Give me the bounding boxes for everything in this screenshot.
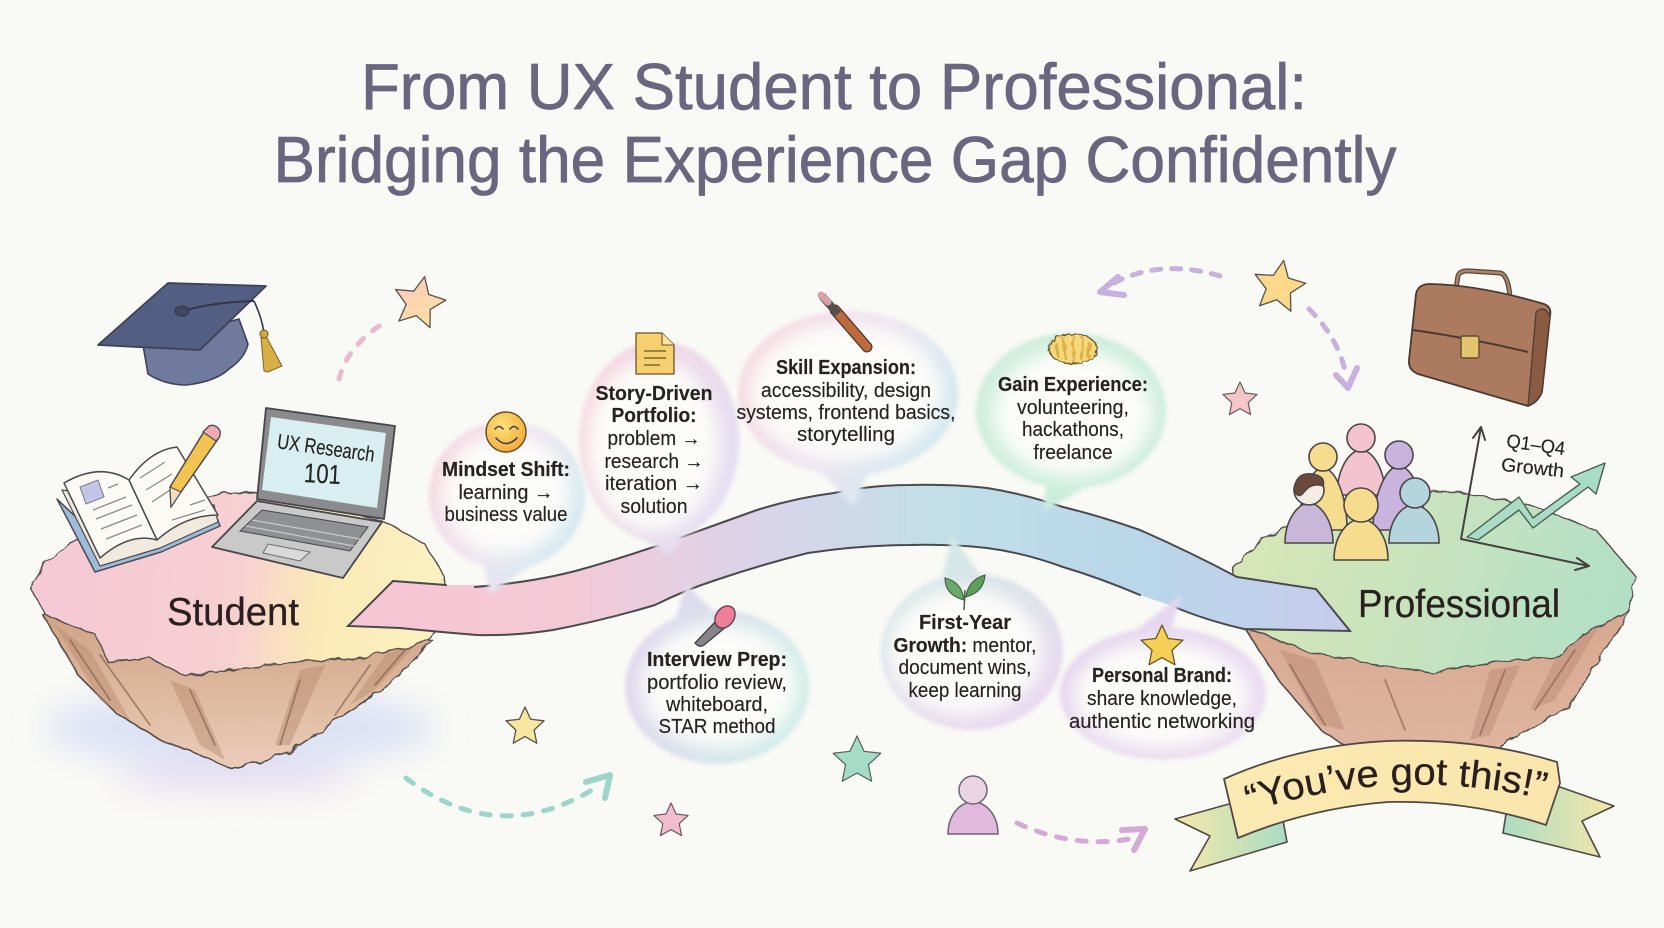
callout: mindset shift: Mindset Shift: [442, 459, 570, 481]
callout: skill expansion: storytelling [797, 424, 895, 446]
callout: mindset shift: business value [444, 504, 568, 526]
banner main scroll [1224, 741, 1560, 838]
callout: first-year growth: Growth: mentor, [894, 635, 1036, 657]
callout: personal brand: Personal Brand: [1092, 665, 1232, 687]
callout: gain experience: freelance [1034, 442, 1112, 464]
callout: first-year growth: document wins, [898, 657, 1032, 679]
callout: story-driven portfolio: Story-Driven [596, 383, 712, 405]
callout: first-year growth: keep learning [908, 680, 1022, 702]
icon: document [636, 333, 674, 374]
label: student: Student [167, 591, 299, 634]
callout: skill expansion: systems, frontend basics, [736, 402, 956, 424]
star: pink right [1223, 382, 1257, 415]
icon: briefcase [1409, 271, 1550, 406]
callout: first-year growth: First-Year [919, 612, 1011, 634]
icon: sprout [945, 575, 985, 610]
icon: smiling face [486, 412, 526, 452]
callout: story-driven portfolio: iteration → [605, 473, 703, 495]
title [274, 50, 1397, 196]
pencil [170, 425, 220, 507]
callout: skill expansion: accessibility, design [761, 380, 931, 402]
title: From UX Student to Professional: [361, 50, 1307, 123]
callout: story-driven portfolio: solution [620, 496, 688, 518]
chart: Q1-Q4 growth [1461, 427, 1605, 570]
panel: student island [30, 408, 446, 792]
label: professional: Professional [1358, 583, 1560, 626]
callout: interview prep: Interview Prep: [647, 649, 787, 671]
icon: pen [821, 295, 867, 347]
arrow: lavender dashed left [1100, 269, 1220, 295]
icon: group of people [1285, 424, 1439, 560]
callout: personal brand: authentic networking [1069, 711, 1255, 733]
island shadow [45, 688, 435, 792]
callout: story-driven portfolio: Portfolio: [612, 405, 696, 427]
callout: interview prep: whiteboard, [665, 694, 768, 716]
icon: microphone [695, 602, 739, 646]
callout: first-year growth [881, 535, 1063, 730]
callout: gain experience: hackathons, [1022, 419, 1124, 441]
callout: personal brand [1060, 595, 1266, 760]
callout: personal brand: share knowledge, [1087, 688, 1237, 710]
island rock [1244, 610, 1629, 750]
star: gold top right [1250, 256, 1309, 313]
callout: gain experience: volunteering, [1017, 397, 1129, 419]
arrow: pink dashed curve to star [339, 323, 384, 379]
chart: Q1-Q4 growth: Growth [1500, 455, 1565, 482]
chart: Q1-Q4 growth: Q1–Q4 [1505, 431, 1567, 460]
icon: gold star [1141, 625, 1183, 665]
icon: laptop [212, 408, 395, 578]
banner right tail [1503, 787, 1614, 857]
callout: story-driven portfolio [579, 333, 739, 555]
callout: gain experience: Gain Experience: [998, 374, 1148, 396]
callout: gain experience [976, 333, 1166, 512]
callout: mindset shift: learning → [458, 482, 554, 504]
arrow: pink-purple dashed [1017, 823, 1145, 850]
arrow: teal dashed [406, 775, 610, 816]
star: pink-yellow top left [389, 271, 450, 330]
icon: lone person [948, 776, 998, 834]
banner: you've got this: “You’ve got this!” [1244, 760, 1548, 805]
panel: professional island [1233, 424, 1636, 750]
icon: laptop: 101 [303, 458, 342, 490]
icon: graduation cap [98, 283, 282, 385]
star: green [833, 736, 881, 781]
callout: interview prep [625, 583, 809, 764]
island top surface [1233, 492, 1636, 673]
title: Bridging the Experience Gap Confidently [274, 123, 1397, 196]
arrow: lavender dashed down [1309, 309, 1357, 388]
icon: golden tuft [1049, 334, 1097, 364]
icon: laptop: UX Research [276, 430, 376, 467]
banner: you've got this [1174, 740, 1615, 872]
callout: mindset shift [429, 412, 585, 594]
island top surface [30, 492, 446, 676]
star: yellow lower left [506, 707, 544, 743]
callout: skill expansion: Skill Expansion: [776, 357, 916, 379]
icon: open book and pencil [57, 425, 220, 572]
callout: interview prep: portfolio review, [647, 672, 787, 694]
banner left tail [1175, 804, 1287, 871]
island rock [43, 610, 432, 769]
callout: interview prep: STAR method [658, 716, 776, 738]
callout: skill expansion [736, 295, 958, 507]
callout: story-driven portfolio: problem → [608, 428, 700, 450]
star: pink bottom [654, 803, 688, 836]
callout: story-driven portfolio: research → [604, 451, 704, 473]
path: ribbon road to professional [348, 485, 1350, 635]
